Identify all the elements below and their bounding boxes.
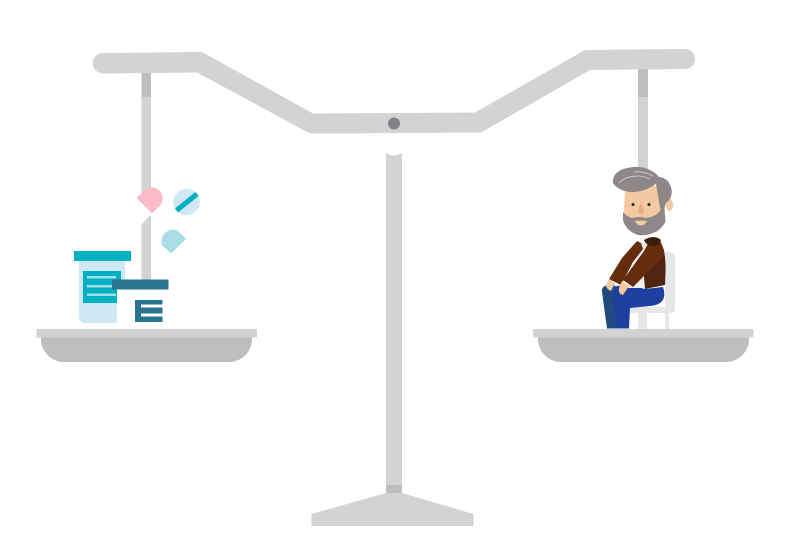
seated man [602, 167, 675, 329]
left pan [36, 329, 257, 362]
scale beam [93, 49, 695, 134]
near hand [619, 281, 629, 295]
hair highlights [619, 172, 653, 183]
scale base [312, 493, 474, 526]
far sleeve [609, 241, 643, 285]
far leg [602, 285, 622, 328]
mouth [635, 220, 647, 226]
icon: round tablet [173, 189, 200, 215]
icon: pink pill [136, 187, 163, 226]
near leg [613, 285, 664, 328]
icon: small medicine jar [112, 280, 168, 323]
right pan [533, 329, 754, 362]
nose [638, 201, 644, 214]
shirt [628, 238, 650, 288]
eyes [632, 203, 650, 206]
collar [644, 237, 661, 246]
icon: blue pill [161, 230, 186, 254]
chair [630, 252, 675, 329]
hair [613, 167, 672, 210]
left hanger rod [142, 73, 151, 280]
near sleeve [623, 240, 664, 287]
jacket body [644, 245, 666, 289]
face [624, 186, 661, 228]
far hand [606, 279, 615, 291]
ear [666, 199, 673, 211]
right hanger rod [638, 69, 648, 179]
beard [623, 203, 666, 235]
beam pivot [388, 118, 400, 130]
centre post [386, 153, 402, 494]
icon: large medicine jar [74, 251, 131, 323]
